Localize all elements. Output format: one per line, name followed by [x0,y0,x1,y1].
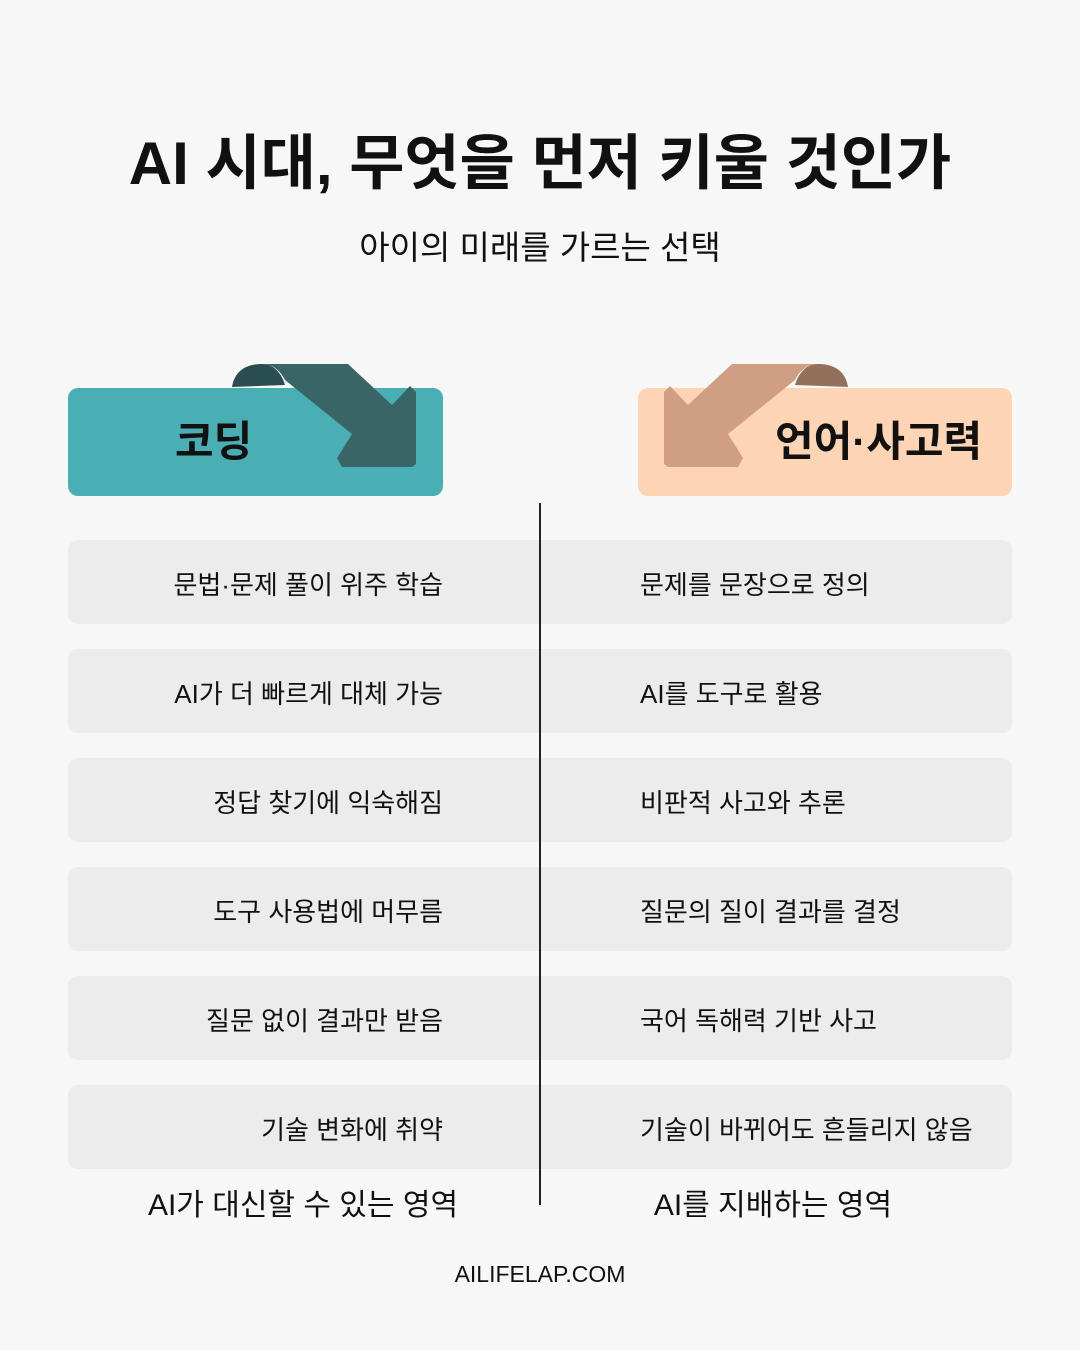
subtitle: 아이의 미래를 가르는 선택 [359,229,721,266]
icon: arrow down-right [232,364,416,467]
comparison rows: 질문의 질이 결과를 결정 [640,897,901,927]
text: language label: 언어·사고력 [775,418,982,465]
comparison rows: 국어 독해력 기반 사고 [640,1006,877,1036]
comparison rows: 도구 사용법에 머무름 [213,897,443,927]
comparison rows: 질문 없이 결과만 받음 [206,1006,443,1036]
comparison rows: 기술 변화에 취약 [261,1115,443,1145]
header: coding [68,388,443,496]
site url: AILIFELAP.COM [455,1261,625,1287]
comparison rows: 비판적 사고와 추론 [640,788,846,818]
icon: arrow down-left [664,364,848,467]
footer label left: AI가 대신할 수 있는 영역 [148,1189,458,1222]
comparison rows: 정답 찾기에 익숙해짐 [213,788,443,818]
text: coding label: 코딩 [175,418,252,465]
comparison rows: 문제를 문장으로 정의 [640,570,870,600]
comparison rows: AI가 더 빠르게 대체 가능 [174,679,443,709]
comparison rows: AI를 도구로 활용 [640,679,823,709]
header: language/thinking [638,388,1012,496]
comparison rows [68,540,1012,1169]
title: AI 시대, 무엇을 먼저 키울 것인가 [129,130,951,197]
comparison rows: 기술이 바뀌어도 흔들리지 않음 [640,1115,973,1145]
footer label right: AI를 지배하는 영역 [654,1189,892,1222]
comparison rows: 문법·문제 풀이 위주 학습 [173,570,443,600]
